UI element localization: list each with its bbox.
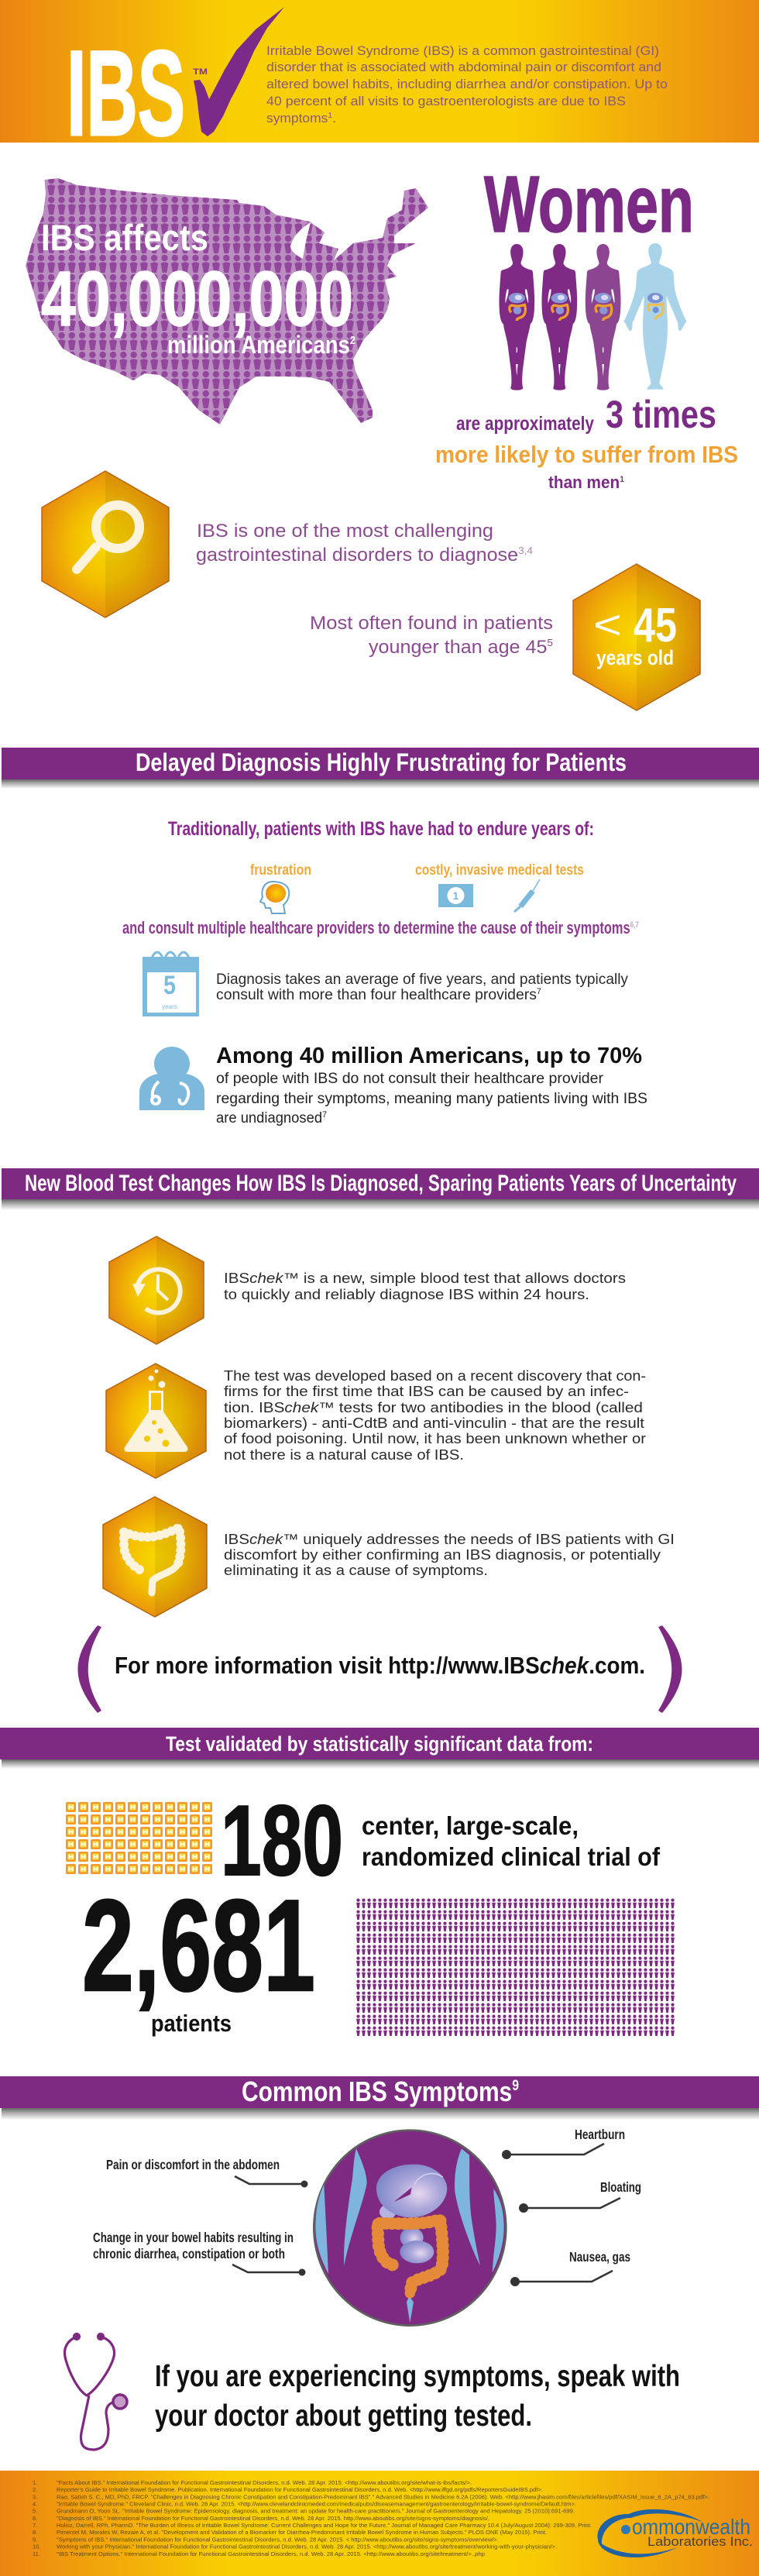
great lakes cut-out xyxy=(290,222,311,259)
intro paragraph: disorder that is associated with abdominal pain or discomfort and xyxy=(266,60,661,74)
reference numbers: 2. xyxy=(33,2486,37,2493)
icon: money bill: 1 xyxy=(452,889,458,902)
reference list: Rao, Satish S. C., MD, PhD, FRCP. "Challenges in Diagnosing Chronic Constipation and Constipation-Predominant IBS"." Advanced Studies in Medicine 6.2A (2006). Web. <http://www.jhasim.com/files/articlefiles/pdf/XASIM_Issue_6_2A_p74_83.pdf>. xyxy=(57,2493,709,2501)
section banner: common symptoms: 9 xyxy=(512,2078,519,2094)
left parenthesis xyxy=(77,1625,101,1713)
section banner: delayed diagnosis xyxy=(2,748,759,789)
text: than men: than men xyxy=(548,473,624,492)
text: challenging to diagnose: IBS is one of the most challenging xyxy=(197,521,493,542)
reference list: "IBS Treatment Options." International Foundation for Functional Gastrointestinal Disorders, n.d. Web. 28 Apr. 2015. <http://www.aboutibs.org/site/treatment/>..php xyxy=(57,2550,485,2557)
text: among 40 million Americans: regarding their symptoms, meaning many patients living with IBS xyxy=(216,1091,647,1107)
text: discovery paragraph xyxy=(224,1367,646,1463)
icon: under 45 hexagon: 45 xyxy=(634,599,677,652)
reference numbers: 10. xyxy=(33,2543,40,2550)
text: discovery paragraph: tion. IBS chek ™ tests for two antibodies in the blood (called xyxy=(224,1399,643,1415)
reference list: Pimentel M, Morales W, Rezaie A, et al. "Development and Validation of a Biomarker for Diarrhea-Predominant Irritable Bowel Syndrome in Human Subjects." PLOS ONE (May 2015). Print. xyxy=(57,2529,547,2536)
text: diagnosis takes five years xyxy=(216,971,628,1003)
map text: IBS affects: IBS affects xyxy=(41,217,208,258)
intro paragraph xyxy=(266,44,668,126)
reference numbers: 1. xyxy=(33,2479,37,2486)
icon: under 45 hexagon: < xyxy=(593,603,622,648)
icon: money bill xyxy=(438,884,473,907)
icon: under 45 hexagon: years old xyxy=(596,646,674,669)
text: patients: patients xyxy=(151,2010,232,2037)
icon: check mark xyxy=(194,7,284,136)
text: diagnosis takes five years: consult with more than four healthcare providers xyxy=(216,986,538,1003)
logo: Commonwealth Laboratories xyxy=(598,2509,753,2557)
icon: flask hexagon xyxy=(106,1364,206,1478)
label: change in bowel habits xyxy=(93,2230,305,2276)
panel: header xyxy=(0,0,759,161)
text: most often found: Most often found in patients xyxy=(310,613,553,634)
text: center large-scale: center, large-scale, xyxy=(362,1811,579,1840)
reference list xyxy=(57,2479,709,2557)
intro paragraph: Irritable Bowel Syndrome (IBS) is a common gastrointestinal (GI) xyxy=(266,44,659,58)
text: center large-scale: randomized clinical trial of xyxy=(362,1842,661,1871)
callouts: symptom labels xyxy=(93,2127,641,2286)
reference numbers: 6. xyxy=(33,2515,37,2522)
text: among 40 million Americans: of people with IBS do not consult their healthcare provider xyxy=(216,1071,604,1087)
title: IBS: IBS xyxy=(67,26,185,161)
text: most often found xyxy=(310,613,553,658)
text: among 40 million Americans: 7 xyxy=(322,1110,327,1119)
reference numbers: 7. xyxy=(33,2522,37,2529)
figures: three women and one man xyxy=(499,243,687,390)
text: most often found: 5 xyxy=(547,637,553,648)
section banner: common symptoms: Common IBS Symptoms xyxy=(242,2076,567,2107)
text: discovery paragraph: not there is a natural cause of IBS. xyxy=(224,1446,464,1463)
intro paragraph: 40 percent of all visits to gastroenterologists are due to IBS xyxy=(266,95,626,108)
icon: calendar five years: years xyxy=(162,1003,177,1010)
section banner: test validated xyxy=(0,1728,759,1769)
reference numbers xyxy=(33,2479,40,2557)
reference list: Reporter's Guide to Irritable Bowel Syndrome. Publication. International Foundation for Functional Gastrointestinal Disorders, n.d. Web. <http://www.iffgd.org/pdfs/ReportersGuideIBS.pdf>. xyxy=(57,2486,543,2493)
text: 3 times: 3 times xyxy=(606,393,716,436)
label: frustration: frustration xyxy=(250,862,311,879)
right parenthesis xyxy=(658,1625,682,1713)
diagram: abdomen with digestive organs xyxy=(314,2131,506,2326)
map of the United States xyxy=(26,178,428,425)
icon: under 45 hexagon xyxy=(573,564,700,710)
text: diagnosis takes five years: 7 xyxy=(537,987,541,996)
reference numbers: 5. xyxy=(33,2507,37,2515)
text: consult multiple providers: 6,7 xyxy=(630,920,639,930)
intro paragraph: altered bowel habits, including diarrhea and/or constipation. Up to xyxy=(266,77,668,91)
number: 180: 180 xyxy=(221,1785,343,1897)
text: among 40 million Americans: are undiagnosed xyxy=(216,1110,326,1126)
text: new simple blood test: IBSchek™ is a new, simple blood test that allows doctors xyxy=(224,1270,626,1286)
text: among 40 million Americans: Among 40 million Americans, up to 70% xyxy=(216,1044,642,1068)
icon: magnifying glass hexagon xyxy=(42,471,169,617)
text: uniquely addresses: eliminating it as a cause of symptoms. xyxy=(224,1562,488,1578)
label: nausea, gas: Nausea, gas xyxy=(569,2249,630,2265)
text: than men: 1 xyxy=(620,475,624,484)
text: new simple blood test xyxy=(224,1270,626,1302)
text: discovery paragraph: of food poisoning. Until now, it has been unknown whether or xyxy=(224,1430,646,1446)
map text: 40,000,000: 40,000,000 xyxy=(41,256,353,342)
text: challenging to diagnose xyxy=(196,521,533,566)
text: center large-scale xyxy=(362,1811,661,1871)
section banner: common symptoms xyxy=(0,2076,759,2120)
label: bloating xyxy=(519,2179,641,2213)
icon: syringe xyxy=(514,879,540,912)
icon: clock hexagon xyxy=(109,1236,204,1344)
text: discovery paragraph: biomarkers) - anti-CdtB and anti-vinculin - that are the result xyxy=(224,1415,644,1431)
intro paragraph: 1 xyxy=(328,112,333,120)
reference list: "Symptoms of IBS." International Foundation for Functional Gastrointestinal Disorders, n.d. Web. 28 Apr. 2015. < http://www.aboutibs.org/site/signs-symptoms/overview/>. xyxy=(57,2536,499,2543)
number: 2,681: 2,681 xyxy=(82,1873,315,2018)
label: change in bowel habits: Change in your bowel habits resulting in xyxy=(93,2230,294,2245)
icon: colon hexagon xyxy=(103,1497,207,1617)
map text: million Americans: 2 xyxy=(350,334,355,347)
icon: patient with stethoscope xyxy=(139,1047,204,1110)
text: challenging to diagnose: 3,4 xyxy=(518,545,533,556)
icon: calendar five years: 5 xyxy=(163,971,176,1000)
section banner: delayed diagnosis: Delayed Diagnosis Highly Frustrating for Patients xyxy=(136,748,627,776)
text: speak with your doctor: your doctor about getting tested. xyxy=(155,2399,532,2433)
reference list: Hulisz, Darrell, RPh, PharmD. "The Burden of Illness of Irritable Bowel Syndrome: Current Challenges and Hope for the Future." Journal of Managed Care Pharmacy 10.4 (July/August 2004): 299-309. Print. xyxy=(57,2522,592,2529)
header background xyxy=(0,0,759,143)
label: bloating: Bloating xyxy=(600,2179,641,2195)
reference list: "Diagnosis of IBS." International Foundation for Functional Gastrointestinal Disorders, n.d. Web. 28 Apr. 2015. http://www.aboutibs.org/site/signs-symptoms/diagnosis/. xyxy=(57,2515,489,2522)
map text: million Americans: million Americans xyxy=(167,331,380,359)
section banner: new blood test xyxy=(2,1168,759,1210)
label: heartburn: Heartburn xyxy=(575,2127,625,2142)
label: nausea, gas xyxy=(510,2249,630,2286)
reference numbers: 8. xyxy=(33,2529,37,2536)
callout: more information xyxy=(77,1625,682,1713)
icon: brain in head xyxy=(260,882,289,913)
reference numbers: 9. xyxy=(33,2536,37,2543)
intro paragraph: symptoms xyxy=(266,112,325,126)
panel: footer references xyxy=(0,2471,759,2576)
icon: calendar five years xyxy=(143,952,199,1016)
section banner: test validated: Test validated by statistically significant data from: xyxy=(166,1732,593,1756)
text: discovery paragraph: The test was developed based on a recent discovery that con- xyxy=(224,1367,646,1384)
chart: patient icon grid xyxy=(355,1898,676,2038)
label: pain or discomfort xyxy=(106,2157,308,2188)
reference list: "Irritable Bowel Syndrome." Cleveland Clinic, n.d. Web. 28 Apr. 2015. <http://www.clevelandclinicmeded.com/medicalpubs/diseasemanagement/gastroenterology/irritable-bowel-syndrome/Default.htm>. xyxy=(57,2501,576,2507)
text: are approximately: are approximately xyxy=(456,413,594,435)
reference numbers: 4. xyxy=(33,2501,37,2507)
label: heartburn xyxy=(502,2127,625,2159)
text: uniquely addresses xyxy=(224,1531,675,1578)
text: most often found: younger than age 45 xyxy=(369,637,539,658)
text: among 40 million Americans xyxy=(216,1044,647,1126)
panel: women statistic xyxy=(435,160,738,492)
panel: US map statistic xyxy=(26,178,428,425)
text: speak with your doctor xyxy=(155,2360,680,2433)
text: uniquely addresses: IBSchek™ uniquely addresses the needs of IBS patients with GI xyxy=(224,1531,675,1547)
heading: traditionally: Traditionally, patients with IBS have had to endure years of: xyxy=(168,818,594,840)
text: diagnosis takes five years: Diagnosis takes an average of five years, and patients typically xyxy=(216,971,628,988)
footer background xyxy=(0,2471,759,2576)
text: discovery paragraph: firms for the first time that IBS can be caused by an infec- xyxy=(224,1383,629,1399)
label: costly tests: costly, invasive medical tests xyxy=(415,862,584,879)
chart: hospital icon grid xyxy=(65,1801,214,1876)
reference list: "Facts About IBS." International Foundation for Functional Gastrointestinal Disorders, n.d. Web. 28 Apr. 2015. <http://www.aboutibs.org/site/what-is-ibs/facts/>. xyxy=(57,2479,472,2486)
label: change in bowel habits: chronic diarrhea, constipation or both xyxy=(93,2246,285,2261)
reference numbers: 11. xyxy=(33,2550,40,2557)
text: challenging to diagnose: gastrointestinal disorders to diagnose xyxy=(196,545,504,566)
text: uniquely addresses: discomfort by either confirming an IBS diagnosis, or potentially xyxy=(224,1546,661,1563)
logo: Commonwealth Laboratories: Laboratories Inc. xyxy=(647,2534,753,2549)
trademark: TM xyxy=(193,67,208,77)
intro paragraph: . xyxy=(332,112,336,126)
reference list: Grundmann O, Yoon SL. "Irritable Bowel Syndrome: Epidemiology, diagnosis, and treatment: an update for health-care practitioners." Journal of Gastroenterology and Hepatology. 25 (2010):691-699. xyxy=(57,2507,575,2515)
icon: stethoscope xyxy=(65,2334,127,2450)
text: new simple blood test: to quickly and reliably diagnose IBS within 24 hours. xyxy=(224,1286,589,1302)
reference list: Working with your Physician." International Foundation for Functional Gastrointestinal Disorders, n.d. Web. 28 Apr. 2015. <http://www.aboutibs.org/site/treatment/working-with-your-physician/>. xyxy=(57,2543,557,2550)
reference numbers: 3. xyxy=(33,2493,37,2501)
link text: For more information visit http://www.IBSchek.com. xyxy=(115,1652,645,1679)
label: pain or discomfort: Pain or discomfort in the abdomen xyxy=(106,2157,280,2172)
